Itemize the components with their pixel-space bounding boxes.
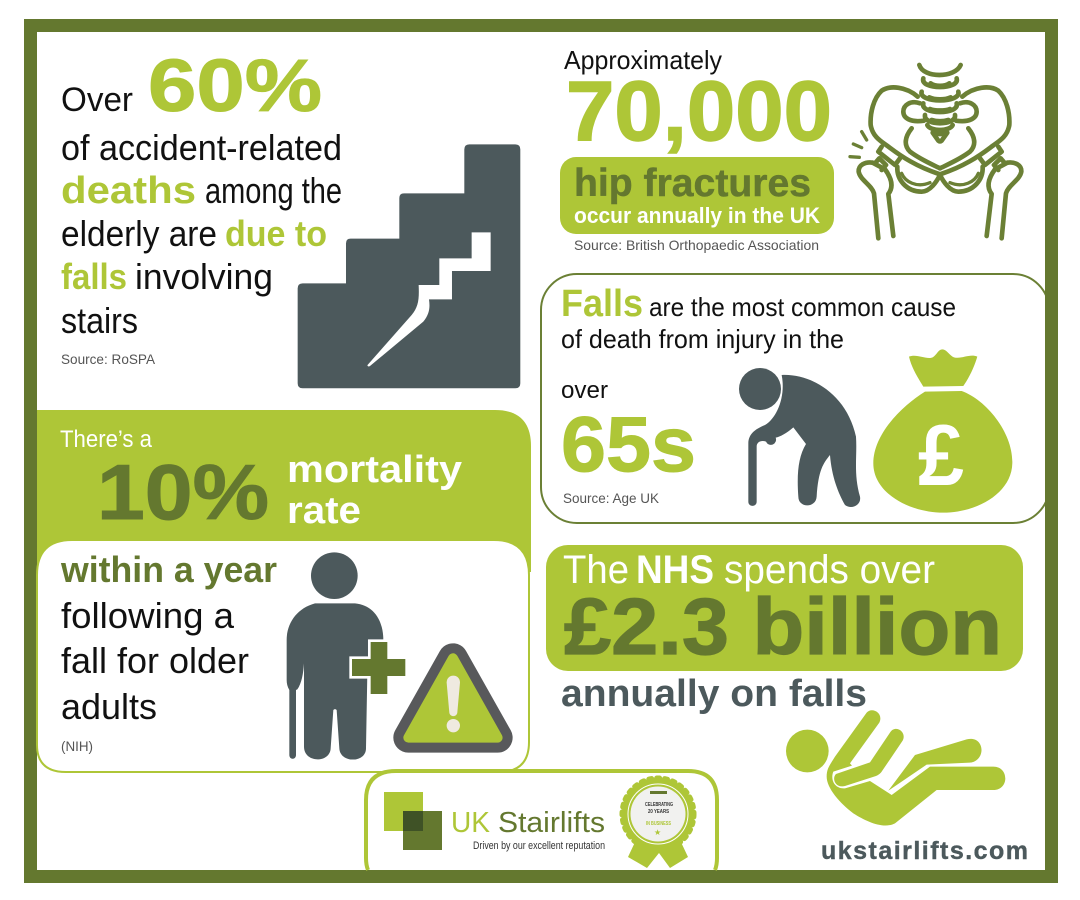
icon: 20 years rosette badge: 20 YEARS [648,809,669,815]
text block: within a year: following a [61,595,235,636]
text block: accident-related deaths: of accident-related [61,127,342,168]
heading: falls are the most common cause: of death from injury in the [561,324,844,354]
banner: green header: mortality [287,449,462,491]
icon: overlapping squares logo [384,792,442,850]
icon: 20 years rosette badge: ★ [654,828,661,837]
source: RoSPA: Source: RoSPA [61,351,156,367]
text block: accident-related deaths: involving [135,256,273,297]
stat heading: over 60%: Over [61,81,133,119]
text block: accident-related deaths: due to [225,213,327,254]
panel: UK Stairlifts logo [366,771,717,870]
text: logo wordmark: Stairlifts [498,807,605,839]
panel: 70,000 hip fractures [560,45,1021,253]
panel: 10% mortality rate [37,410,531,772]
panel: 60% stair deaths [61,44,520,388]
icon: person with crutch and medical cross [287,552,498,760]
callout: NHS £2.3 billion [546,545,1023,671]
heading: falls are the most common cause [561,283,956,404]
source: NIH: (NIH) [61,738,93,754]
icon: pelvis with fractured hip [850,65,1021,238]
panel: NHS spend [546,545,1028,865]
icon: 20 years rosette badge [622,778,694,868]
icon: money bag with pound sign [873,349,1012,513]
icon: 20 years rosette badge: IN BUSINESS [646,821,671,827]
card: white lower panel [37,540,529,772]
banner: green header: rate [287,490,361,532]
callout: NHS £2.3 billion: NHS [636,548,714,592]
text block: accident-related deaths: deaths [61,170,196,212]
callout: hip fractures: occur annually in the UK [574,203,820,228]
heading: falls are the most common cause: are the most common cause [649,292,956,322]
banner: green header: There’s a [60,426,153,453]
text: approximately: Approximately [564,45,722,75]
text: annually on falls: annually on falls [561,673,867,715]
callout: hip fractures: hip fractures [574,162,811,205]
text block: within a year: within a year [60,549,277,590]
text: website url: ukstairlifts.com [821,837,1028,865]
source: Age UK: Source: Age UK [563,490,660,506]
icon: money bag with pound sign: £ [918,408,964,504]
stat heading: over 60% [61,44,322,127]
text: logo wordmark: UK [451,807,491,839]
heading: falls are the most common cause: over [561,377,608,404]
icon: hunched older person with cane [739,368,860,507]
banner: green header [37,410,531,572]
panel: falls over 65s [541,274,1049,523]
source: British Orthopaedic Association: Source: British Orthopaedic Association [574,237,819,253]
text block: accident-related deaths: stairs [61,300,138,341]
banner: green header: 10% [97,448,269,536]
stat heading: over 60%: 60% [148,44,322,127]
callout: NHS £2.3 billion: The [563,548,629,592]
icon: falling person [786,710,1005,825]
heading: falls are the most common cause: Falls [561,283,643,325]
callout: NHS £2.3 billion: £2.3 billion [564,582,1002,671]
icon: cracked staircase [298,144,520,388]
text block: within a year: fall for older [61,640,249,681]
text block: within a year [60,549,277,727]
stat: 65s: 65s [561,400,696,488]
text block: accident-related deaths: among the [205,170,342,211]
icon: 20 years rosette badge: CELEBRATING [645,802,673,808]
text: logo wordmark [451,807,605,852]
stat: 70,000: 70,000 [566,64,832,158]
text block: accident-related deaths: elderly are [61,213,217,254]
callout: hip fractures [560,157,834,234]
text block: accident-related deaths [61,127,342,341]
text block: accident-related deaths: falls [61,256,127,297]
text: logo wordmark: Driven by our excellent reputation [473,840,605,852]
text block: within a year: adults [61,686,157,727]
callout: NHS £2.3 billion: spends over [724,548,935,592]
